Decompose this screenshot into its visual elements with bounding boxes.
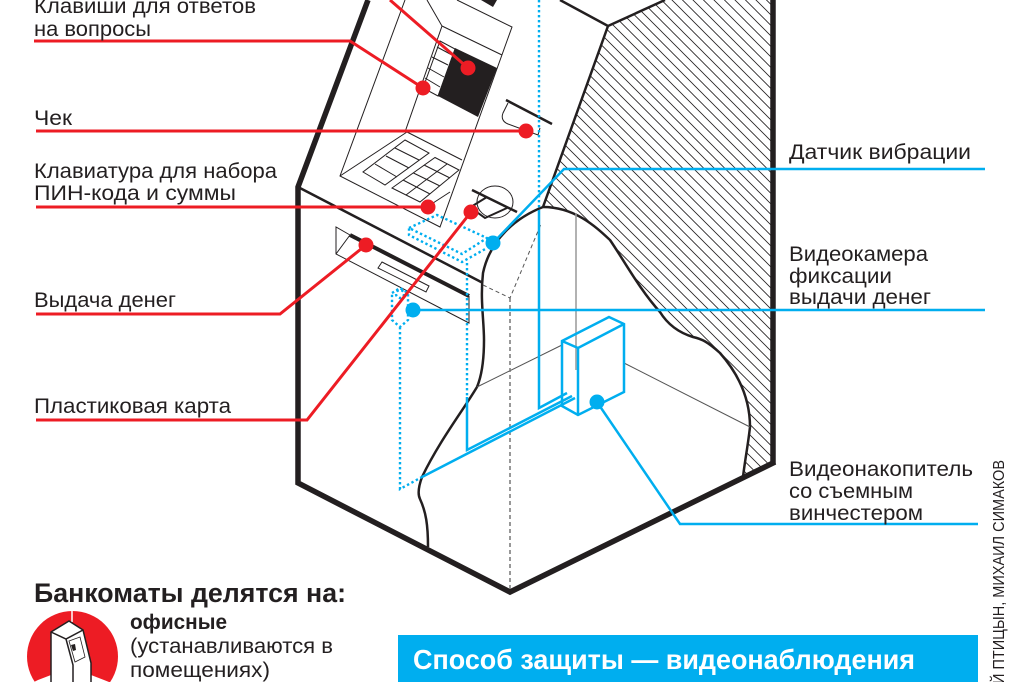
label: camera: выдачи денег <box>789 285 931 309</box>
ATM display panel <box>340 0 512 227</box>
label: keypad: Клавиатура для набора <box>34 159 277 183</box>
hidden camera wiring <box>392 0 575 489</box>
cash dispenser <box>336 227 469 323</box>
keypad for PIN and amount <box>363 140 459 205</box>
receipt slot <box>502 100 552 135</box>
red callout dots <box>358 60 534 252</box>
label: camera: фиксации <box>789 264 892 288</box>
label: video recorder: со съемным <box>789 479 913 503</box>
label: camera: Видеокамера <box>789 242 928 266</box>
label: receipt: Чек <box>34 106 73 130</box>
credits: Й ПТИЦЫН, МИХАИЛ СИМАКОВ <box>989 460 1008 682</box>
label: answer keys: на вопросы <box>34 17 151 41</box>
ATM body outline <box>298 0 775 592</box>
panel: protection method <box>398 635 978 682</box>
icon: office ATM <box>27 610 118 682</box>
red callout lines <box>34 0 526 420</box>
text: office ATM description: офисные <box>130 610 227 634</box>
hatched interior side wall <box>543 0 773 477</box>
answer keys <box>423 41 455 96</box>
label: video recorder <box>789 457 973 525</box>
blue callout lines and dots <box>406 169 985 524</box>
label: plastic card: Пластиковая карта <box>34 394 231 418</box>
text: office ATM description: (устанавливаются в <box>130 634 333 658</box>
interior lines <box>477 213 750 590</box>
label: vibration sensor: Датчик вибрации <box>789 140 971 164</box>
card slot <box>472 186 517 218</box>
heading: ATM types: Банкоматы делятся на: <box>34 578 346 608</box>
label: keypad: ПИН-кода и суммы <box>34 181 236 205</box>
text: office ATM description: помещениях) <box>130 658 270 682</box>
screen <box>438 48 497 117</box>
label: answer keys <box>34 0 256 41</box>
label: cash dispenser: Выдача денег <box>34 288 176 312</box>
label: video recorder: Видеонакопитель <box>789 457 973 481</box>
label: keypad <box>34 159 277 205</box>
text: office ATM description <box>130 610 333 682</box>
panel: protection method: Способ защиты — видеонаблюдения <box>413 644 915 675</box>
label: video recorder: винчестером <box>789 501 923 525</box>
label: camera <box>789 242 931 309</box>
cutaway contour <box>419 207 750 547</box>
video recorder box <box>562 317 624 415</box>
